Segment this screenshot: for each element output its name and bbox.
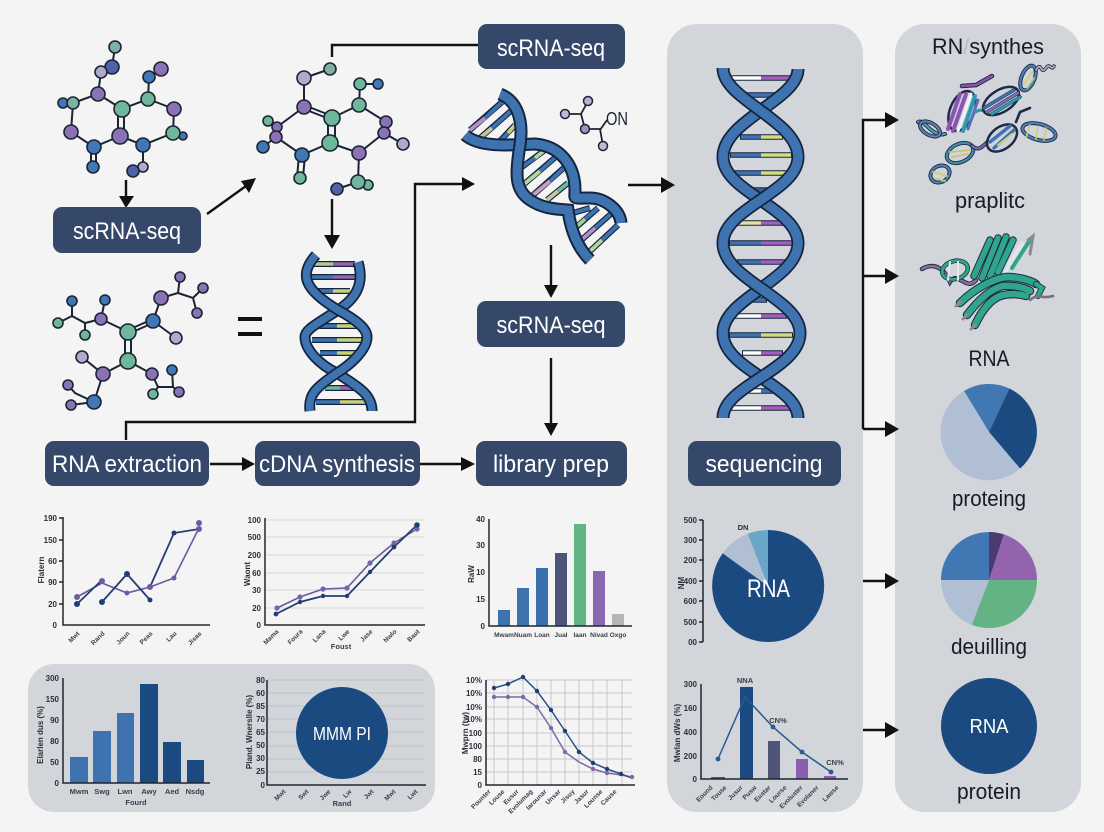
bar chart 3: RaW — [467, 565, 476, 583]
arrow: bar chart to RNA circle — [863, 722, 899, 738]
label: protein: protein — [957, 779, 1021, 804]
line chart 1: 20 — [48, 600, 58, 609]
bar chart on panel: 50 — [50, 758, 60, 767]
label box: scRNA-seq middle — [477, 301, 625, 347]
pie chart with axis — [677, 516, 824, 647]
chart with MMM PI circle: Swt — [297, 788, 311, 802]
bar and line chart: 400 — [684, 728, 698, 737]
label: deuilling: deuilling — [951, 634, 1027, 659]
bar chart 3: Iaan — [573, 632, 587, 639]
icon: molecule top centre — [257, 63, 409, 195]
line chart 2: 100 — [248, 516, 262, 525]
label box: RNA extraction: RNA extraction — [52, 451, 202, 478]
icon: molecule top left — [58, 41, 187, 177]
heading: RN/synthes: RN/synthes — [932, 34, 1044, 59]
line chart 2: Foura — [287, 628, 305, 646]
bar and line chart: Mwlan dWs (%) — [673, 704, 682, 762]
arrow: molecule to scRNA-seq — [119, 180, 134, 208]
label box: RNA extraction — [45, 441, 209, 486]
bar and line chart: 160 — [684, 704, 698, 713]
line chart 4 with grid: Cause — [600, 788, 619, 807]
bar chart on panel: Nsdg — [186, 787, 205, 796]
chart with MMM PI circle: Rand — [333, 799, 352, 808]
icon: green protein ribbons — [922, 236, 1053, 329]
bar chart on panel: Lwn — [118, 787, 133, 796]
panel: sequencing column — [667, 24, 863, 812]
chart with MMM PI circle: Jwt — [363, 788, 376, 801]
bar and line chart: Evolaner — [796, 784, 821, 809]
bar chart 3: 10 — [476, 568, 486, 577]
line chart 4 with grid: Lounse — [583, 788, 605, 810]
label box: cDNA synthesis — [255, 441, 420, 486]
pie chart with axis: 500 — [684, 516, 698, 525]
chart with MMM PI circle: 60 — [256, 689, 266, 698]
arrow: pie to deuilling — [863, 573, 899, 589]
line chart 4 with grid — [461, 675, 635, 815]
equals sign — [238, 317, 262, 336]
bar chart 3: Jual — [554, 632, 568, 639]
bar chart on panel: Fourd — [125, 798, 147, 807]
label box: scRNA-seq top — [478, 24, 625, 69]
bar and line chart: 200 — [684, 752, 698, 761]
line chart 4 with grid: 10% — [466, 703, 482, 712]
pie chart with axis: 500 — [684, 618, 698, 627]
bar chart on panel: Aed — [165, 787, 180, 796]
chart with MMM PI circle: 80 — [256, 676, 266, 685]
line chart 2: 500 — [248, 533, 262, 542]
bar chart on panel: Mwm — [70, 787, 89, 796]
bar and line chart: Touse — [710, 784, 729, 803]
bar chart 3: 30 — [476, 541, 486, 550]
pie chart with axis: 200 — [684, 556, 698, 565]
icon: branched molecule lower left — [53, 272, 208, 410]
bar and line chart: Eound — [695, 784, 714, 804]
icon: small DNA helix — [305, 255, 372, 411]
line chart 4 with grid: Iarounar — [525, 788, 549, 812]
line chart 2: Baut — [406, 628, 422, 644]
bar chart on panel: 0 — [55, 779, 60, 788]
line chart 4 with grid: Unsar — [544, 788, 563, 806]
label box: cDNA synthesis: cDNA synthesis — [259, 451, 415, 478]
pie chart with axis: DN — [738, 523, 748, 532]
line chart 4 with grid: Mwprn (tw) — [461, 712, 470, 754]
line chart 4 with grid: 10% — [466, 676, 482, 685]
line chart 2: 20 — [252, 604, 262, 613]
chart with MMM PI circle: 30 — [256, 754, 266, 763]
chart with MMM PI circle: 50 — [256, 741, 266, 750]
line chart 2: 0 — [257, 621, 262, 630]
label: RNA: RNA — [968, 346, 1010, 371]
label: proteing: proteing — [952, 486, 1026, 511]
line chart 4 with grid: 100 — [469, 742, 483, 751]
line chart 4 with grid: 100 — [469, 729, 483, 738]
bar chart on panel: 80 — [50, 737, 60, 746]
line chart 2: Lana — [312, 628, 328, 644]
line chart 4 with grid: 10% — [466, 715, 482, 724]
pie chart with axis: 00 — [688, 638, 698, 647]
label: praplitc: praplitc — [955, 188, 1025, 213]
icon: purple-blue RNA ribbons — [917, 64, 1057, 186]
arrow: tilted DNA to scRNA-seq box — [544, 245, 558, 298]
label box: library prep: library prep — [493, 451, 609, 478]
line chart 4 with grid: 10% — [466, 689, 482, 698]
bar chart on panel: Awy — [141, 787, 157, 796]
line chart 1: Flatern — [37, 557, 46, 583]
pie chart with axis: NM — [677, 576, 686, 589]
arrow: cDNA synthesis to library prep — [420, 457, 475, 471]
bar chart on panel: 300 — [46, 674, 60, 683]
arrow: tilted DNA to sequencing — [628, 177, 675, 193]
chart with MMM PI circle: 25 — [256, 767, 266, 776]
bar and line chart: CN% — [769, 716, 787, 725]
bar chart on panel: Swg — [94, 787, 110, 796]
line chart 4 with grid: Pounter — [470, 788, 493, 811]
bar and line chart: 0 — [693, 775, 698, 784]
line chart 1: Peas — [139, 630, 155, 646]
line chart 2: 200 — [248, 551, 262, 560]
pie chart with axis: 600 — [684, 597, 698, 606]
line chart 1: 190 — [44, 514, 58, 523]
line chart 1: Lau — [165, 630, 178, 644]
bar chart 3: Loan — [534, 632, 550, 639]
line chart 1: 60 — [48, 557, 58, 566]
bar chart 3: Mwam — [494, 632, 514, 639]
line chart 1: 90 — [48, 578, 58, 587]
line chart 4 with grid: 0 — [478, 781, 483, 790]
line chart 2: Foust — [331, 642, 352, 651]
bar chart 3: Nivad — [590, 632, 608, 639]
line chart 2: Mama — [262, 628, 281, 646]
label box: sequencing: sequencing — [706, 451, 822, 478]
line chart 1: Joun — [115, 630, 131, 646]
label box: scRNA-seq left: scRNA-seq — [73, 218, 181, 245]
chart with MMM PI circle: MMM PI — [313, 724, 371, 744]
line chart 2 — [243, 516, 425, 651]
chart with MMM PI circle: Pland. Wnerslle (%) — [245, 695, 254, 769]
icon: small side-chain molecule with ON label: ON — [606, 109, 628, 129]
circle: RNA — [941, 678, 1037, 774]
line chart 1: Mwt — [68, 630, 82, 644]
label box: scRNA-seq top: scRNA-seq — [497, 35, 605, 62]
chart with MMM PI circle: 85 — [256, 702, 266, 711]
line chart 1: 0 — [53, 621, 58, 630]
arrow: molecule to small DNA — [324, 199, 340, 249]
pie chart with axis: 300 — [684, 536, 698, 545]
line chart 2: Nwlo — [382, 628, 398, 644]
chart with MMM PI circle: Mwt — [274, 788, 288, 802]
arrow: RNA extraction elbow to tilted DNA — [126, 177, 475, 440]
label box: scRNA-seq left — [53, 207, 201, 253]
line chart 4 with grid: Jasur — [573, 788, 591, 806]
bar and line chart: Evoluster — [779, 784, 805, 810]
chart with MMM PI circle: 0 — [261, 781, 266, 790]
line chart 2: Jase — [359, 628, 375, 644]
panel: bottom-left charts — [28, 664, 435, 812]
bar and line chart — [673, 676, 848, 810]
pie chart: proteing — [941, 384, 1037, 480]
chart with MMM PI circle: Lwt — [407, 788, 420, 801]
line chart 1: Jisas — [187, 630, 204, 647]
chart with MMM PI circle: Mwt — [384, 788, 398, 802]
pie chart with axis: 400 — [684, 577, 698, 586]
arrow: scRNA-seq box to library prep — [544, 358, 558, 436]
chart with MMM PI circle — [245, 676, 426, 808]
line chart 1: Rand — [90, 630, 106, 647]
chart with MMM PI circle: Lw — [342, 788, 354, 800]
line chart 2: 30 — [252, 586, 262, 595]
chart with MMM PI circle: Jwe — [319, 788, 333, 802]
pie chart with axis: RNA — [747, 575, 790, 603]
bar and line chart: CN% — [826, 758, 844, 767]
ribbon two — [976, 64, 1054, 121]
line chart 4 with grid: Louse — [488, 788, 507, 807]
bar chart on panel: Elarlen dus (%) — [36, 706, 45, 764]
bar and line chart: Lawse — [821, 784, 841, 803]
bar and line chart: NNA — [737, 676, 754, 685]
arrow: scRNA-seq to molecule — [207, 178, 256, 214]
bar chart 3 — [467, 515, 632, 639]
bar chart 3: 15 — [476, 595, 486, 604]
line chart 4 with grid: Jisuy — [560, 788, 577, 805]
line chart 4 with grid: 80 — [473, 755, 483, 764]
chart with MMM PI circle: 70 — [256, 715, 266, 724]
bar chart 3: Nuam — [514, 632, 532, 639]
arrows: sequencing bracket to synthesis panel — [863, 112, 899, 437]
bar chart on panel — [36, 674, 210, 807]
bar chart 3: 0 — [481, 622, 486, 631]
label box: library prep — [476, 441, 627, 486]
label box: sequencing — [688, 441, 841, 486]
bar and line chart: 300 — [684, 680, 698, 689]
line chart 4 with grid: Evolumag — [507, 788, 534, 815]
line chart 4 with grid: Eusur — [502, 788, 521, 806]
line chart 2: Waont — [243, 562, 252, 586]
bar chart on panel: 150 — [46, 695, 60, 704]
bar chart 3: Oxgo — [610, 632, 626, 639]
bar and line chart: Pusw — [741, 784, 759, 801]
bar and line chart: Lourse — [768, 784, 789, 805]
bar and line chart: Jusur — [727, 784, 745, 802]
icon: tilted DNA helix — [465, 94, 621, 260]
label box: scRNA-seq middle: scRNA-seq — [496, 312, 606, 339]
circle: RNA: RNA — [970, 716, 1009, 738]
chart with MMM PI circle: 65 — [256, 728, 266, 737]
panel: RNA synthesis column — [895, 24, 1081, 812]
arrow: RNA extraction to cDNA synthesis — [210, 457, 255, 471]
line chart 4 with grid: 15 — [473, 768, 483, 777]
ribbon three — [927, 108, 1057, 186]
icon: small side-chain molecule with ON label — [560, 96, 628, 150]
bar and line chart: Eustar — [753, 784, 773, 804]
pie chart: deuilling — [941, 532, 1037, 628]
bar chart 3: 40 — [476, 515, 486, 524]
icon: large DNA helix — [723, 68, 800, 418]
bar chart on panel: 90 — [50, 716, 60, 725]
line chart 1: 150 — [44, 536, 58, 545]
ribbon one — [917, 76, 992, 140]
line chart 1 — [37, 514, 210, 647]
line chart 2: 60 — [252, 569, 262, 578]
arrow: molecule to top scRNA-seq box — [332, 45, 478, 57]
line chart 2: Lwe — [338, 628, 352, 642]
